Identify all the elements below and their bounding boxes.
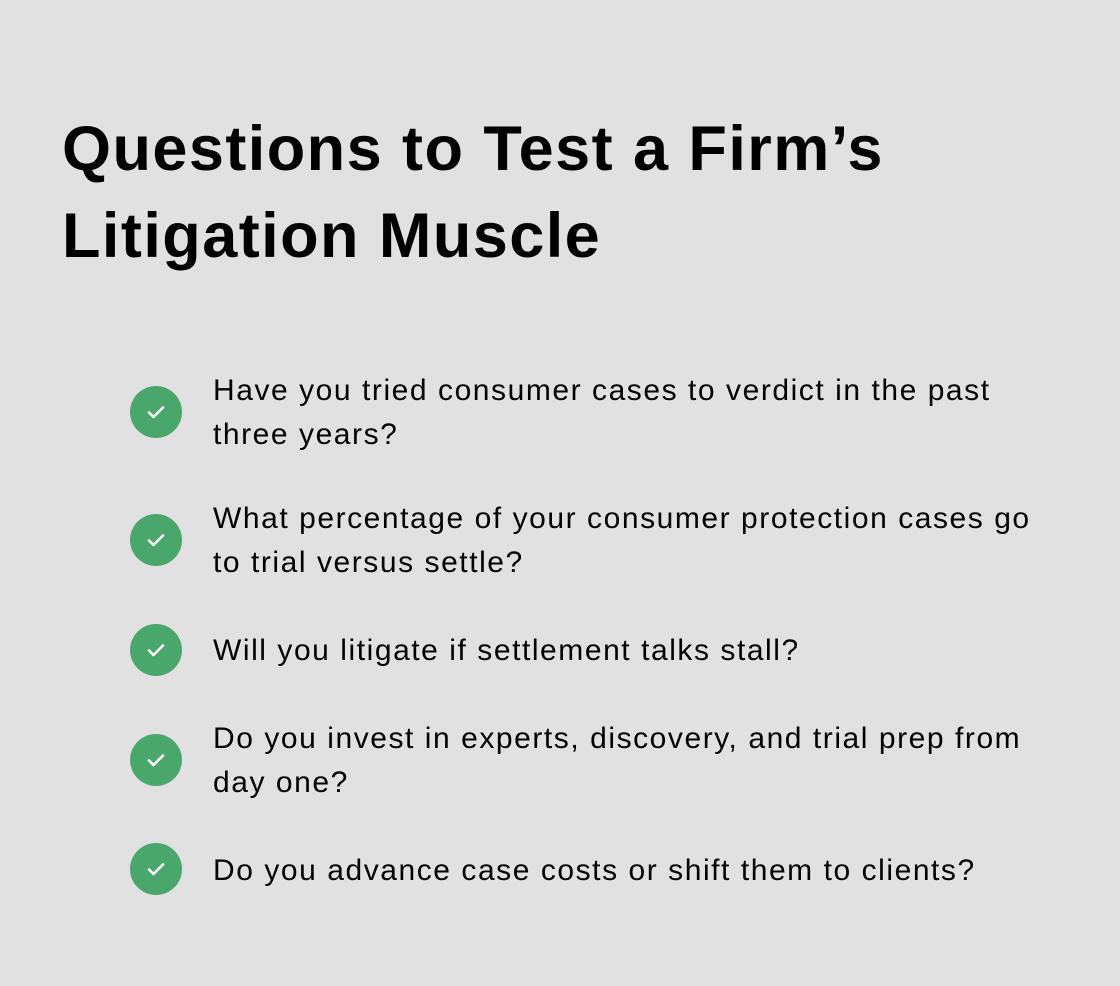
text: Do you advance case costs or shift them to clients?: [213, 854, 976, 887]
text: to trial versus settle?: [213, 546, 524, 579]
item 1: [130, 374, 991, 451]
text: [213, 722, 1021, 799]
icon: check: [130, 386, 182, 438]
item 2: [130, 502, 1031, 579]
text: [213, 374, 991, 451]
icon: check: [130, 843, 182, 895]
title: Questions to Test a Firm’s: [62, 114, 884, 184]
title: Litigation Muscle: [62, 201, 601, 271]
icon: check: [130, 734, 182, 786]
item 3: [130, 624, 800, 676]
icon: check: [130, 514, 182, 566]
text: [213, 502, 1031, 579]
icon: check: [130, 624, 182, 676]
text: Do you invest in experts, discovery, and trial prep from: [213, 722, 1021, 755]
item 5: [130, 843, 976, 895]
text: day one?: [213, 766, 349, 799]
text: three years?: [213, 418, 398, 451]
item 4: [130, 722, 1021, 799]
text: Have you tried consumer cases to verdict in the past: [213, 374, 991, 407]
text: What percentage of your consumer protection cases go: [213, 502, 1031, 535]
text: Will you litigate if settlement talks stall?: [213, 634, 800, 667]
title: [62, 114, 884, 271]
